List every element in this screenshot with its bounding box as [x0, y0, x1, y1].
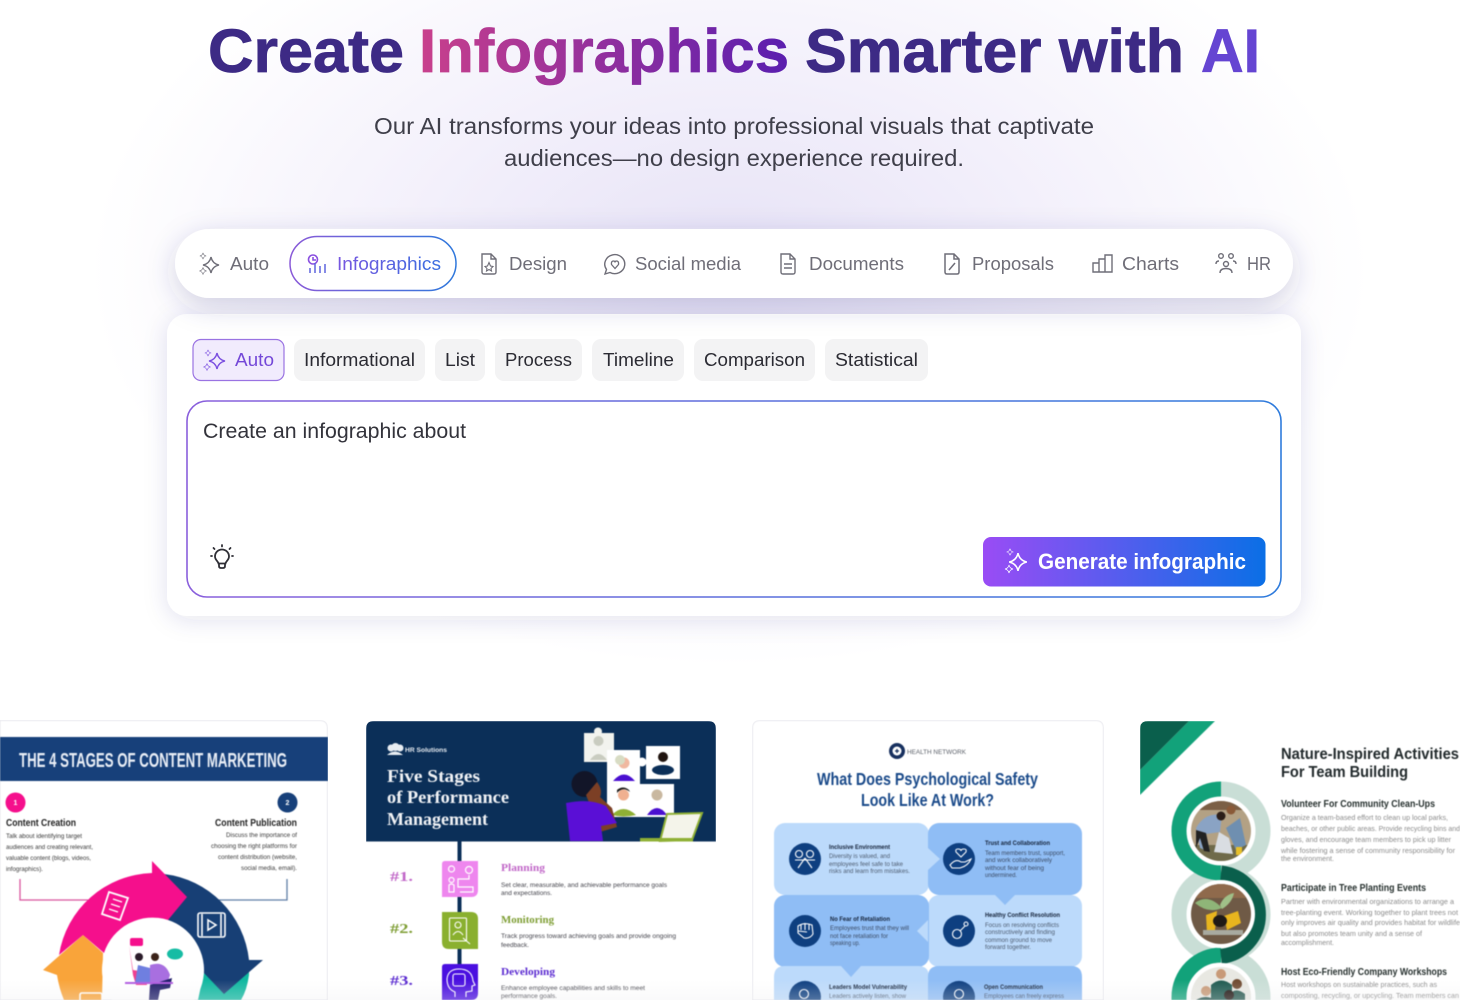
chip: Statistical [825, 339, 928, 381]
cycle diagram [43, 861, 263, 1000]
subtitle: audiences—no design experience required. [504, 145, 964, 171]
tab: Infographics (active): Infographics [337, 253, 441, 274]
activity 1: Organize a team-based effort to clean up local parks, [1281, 813, 1448, 822]
bubble: leaders model vulnerability: Leaders Model Vulnerability [829, 985, 908, 991]
tab: Charts: Charts [1122, 253, 1179, 274]
activity 1 [1280, 799, 1460, 863]
tab: Social media: Social media [635, 253, 742, 274]
chip: Timeline [592, 339, 684, 381]
chip: Statistical: Statistical [835, 349, 918, 370]
panel: prompt card [167, 314, 1301, 616]
bubble: leaders model vulnerability: Leaders actively listen, show [829, 994, 907, 1000]
card title [1281, 746, 1459, 781]
bubble: inclusive environment: Diversity is valued, and [829, 854, 890, 860]
panel: category tab bar [175, 229, 1293, 298]
step 2: monitoring: #2. [390, 921, 413, 936]
bubble: no fear of retaliation: speaking up. [830, 941, 860, 947]
chip: List: List [445, 349, 475, 370]
subtitle: Our AI transforms your ideas into professional visuals that captivate [374, 113, 1094, 139]
tab: Design [482, 253, 567, 274]
card title: What Does Psychological Safety [817, 769, 1038, 789]
header band [0, 737, 328, 781]
card: performance management infographic [366, 721, 716, 1000]
header: HR Solutions [405, 747, 447, 754]
header: Management [387, 809, 488, 829]
step 1: planning: Planning [501, 863, 545, 874]
step 1 text [6, 792, 93, 900]
step 3: developing: #3. [390, 973, 413, 988]
bubble: leaders model vulnerability [789, 981, 908, 1000]
step 2 text: Discuss the importance of [226, 832, 297, 839]
step 1: planning [390, 861, 668, 897]
card title: Look Like At Work? [861, 790, 994, 810]
bubble: trust and collaboration [943, 841, 1065, 879]
bubble: healthy conflict resolution [943, 913, 1060, 951]
step 2 text: choosing the right platforms for [211, 843, 298, 850]
photo: workshop group [1187, 963, 1255, 1000]
chip: Process [495, 339, 582, 381]
step 1 text: audiences and creating relevant, [6, 844, 93, 851]
illustration: team puzzle and thinker [566, 728, 702, 842]
header band: THE 4 STAGES OF CONTENT MARKETING [19, 750, 287, 772]
title: Infographics [419, 17, 789, 85]
activity 3: Host workshops on sustainable practices, such as [1281, 980, 1437, 989]
activity 2: tree-planting event. Working together to plant trees not [1281, 908, 1459, 917]
bubble: healthy conflict resolution: forward together. [985, 945, 1031, 951]
card title [816, 771, 1038, 807]
tab: Design: Design [509, 253, 567, 274]
step 3: developing [390, 964, 645, 1000]
speech bubble grid [774, 823, 1082, 1000]
bubble: trust and collaboration: Trust and Collaboration [985, 841, 1050, 847]
chip: List [435, 339, 485, 381]
step 1: planning: and expectations. [501, 890, 552, 897]
header: Five Stages [387, 766, 480, 786]
step 2 text: Content Publication [215, 818, 297, 829]
chip: Comparison [694, 339, 815, 381]
step 3: developing: performance goals. [501, 993, 557, 1000]
step 1: planning: #1. [390, 869, 413, 884]
chip: Auto (selected): Auto [235, 349, 274, 370]
bubble: inclusive environment [789, 843, 910, 875]
step 2 text: content distribution (website, [218, 854, 297, 861]
bubble: open communication: Open Communication [984, 985, 1043, 991]
step 2: monitoring: Track progress toward achieving goals and provide ongoing [501, 933, 676, 940]
icon: video [198, 913, 225, 937]
activity 2: Participate in Tree Planting Events [1281, 883, 1426, 894]
title: Create [208, 17, 404, 85]
bubble: healthy conflict resolution: Healthy Conflict Resolution [985, 913, 1060, 919]
tab: Charts [1093, 253, 1179, 274]
subtitle [374, 113, 1094, 171]
title: Smarter with [805, 17, 1184, 85]
icon: document [102, 892, 128, 920]
photo: clean-up volunteers [1190, 800, 1252, 862]
step 1: planning: Set clear, measurable, and achievable performance goals [501, 882, 668, 889]
linked photo rings [1179, 789, 1263, 1000]
activity 2: accomplishment. [1281, 938, 1334, 947]
chip: Informational: Informational [304, 349, 415, 370]
bubble: inclusive environment: employees feel safe to take [829, 862, 904, 868]
step 1 text: 1 [14, 800, 18, 807]
bubble: trust and collaboration: Team members trust, support, [985, 851, 1065, 857]
title: AI [1201, 17, 1260, 85]
bubble: healthy conflict resolution: common ground to move [985, 938, 1053, 944]
chip: Process: Process [505, 349, 572, 370]
icon: lightbulb [211, 545, 233, 568]
timeline spine [458, 841, 462, 1000]
step 1 text: Content Creation [6, 818, 76, 829]
chip: Informational [294, 339, 425, 381]
step 1 text: Talk about identifying target [6, 833, 82, 840]
bubble: healthy conflict resolution: Focus on resolving conflicts [985, 923, 1059, 929]
activity 2: but also promotes team unity and a sense of [1281, 929, 1423, 938]
step 2: monitoring: Monitoring [501, 915, 554, 926]
title [208, 17, 1260, 85]
tab: Auto [199, 253, 269, 275]
chip: Auto (selected) [193, 340, 284, 380]
card title: For Team Building [1281, 764, 1408, 781]
icon: tablet [80, 993, 102, 1000]
button: generate infographic [983, 537, 1266, 586]
step 2: monitoring: feedback. [501, 942, 529, 949]
bubble: no fear of retaliation: No Fear of Retaliation [830, 917, 890, 923]
tab: Proposals: Proposals [972, 253, 1054, 274]
tab: HR [1216, 253, 1271, 274]
step 3: developing: Enhance employee capabilities and skills to meet [501, 985, 645, 992]
header: of Performance [387, 787, 509, 807]
bubble: no fear of retaliation: Employees trust that they will [830, 926, 909, 932]
bubble: trust and collaboration: and work collaboratively [985, 858, 1052, 864]
category chips row [193, 339, 928, 381]
chip: Timeline: Timeline [603, 349, 674, 370]
activity 1: gloves, and encourage team members to pick up litter [1281, 835, 1451, 844]
corner ribbon [1140, 721, 1215, 795]
bubble: open communication [943, 981, 1064, 1000]
bubble: trust and collaboration: without fear of being [984, 866, 1044, 872]
activity 1: while fostering a sense of community responsibility for [1280, 846, 1455, 855]
bubble: inclusive environment: Inclusive Environment [829, 845, 890, 851]
chip: Comparison: Comparison [704, 349, 805, 370]
step 2 text [211, 792, 298, 900]
tab: Auto: Auto [230, 253, 269, 274]
activity 1: Volunteer For Community Clean-Ups [1281, 799, 1435, 810]
bubble: trust and collaboration: undermined. [985, 873, 1017, 879]
activity 1: the environment. [1281, 854, 1334, 863]
bubble: inclusive environment: risks and learn from mistakes. [829, 869, 910, 875]
tab: Infographics (active) [290, 236, 456, 290]
step 1 text: valuable content (blogs, videos, [6, 855, 91, 862]
activity 2: Partner with environmental organizations to arrange a [1281, 897, 1455, 906]
bubble: no fear of retaliation [789, 915, 909, 947]
step 2: monitoring [390, 912, 676, 949]
logo: Health Network [889, 743, 967, 759]
button: generate infographic: Generate infographic [1038, 549, 1246, 574]
bubble: healthy conflict resolution: constructively and finding [985, 930, 1055, 936]
activity 3 [1281, 967, 1459, 1000]
header [366, 721, 716, 842]
step 2 text: 2 [286, 800, 290, 807]
card: nature team building infographic [1140, 721, 1460, 1000]
prompt text: Create an infographic about [203, 420, 466, 443]
step 1 text: infographics). [6, 866, 43, 873]
card: content marketing infographic [0, 720, 328, 1000]
activity 2 [1281, 883, 1460, 947]
tab: HR: HR [1247, 253, 1271, 274]
bubble: open communication: Employees can freely express [984, 994, 1064, 1000]
logo: Health Network: HEALTH NETWORK [907, 749, 967, 756]
card: psychological safety infographic [752, 720, 1104, 1000]
logo: HR Solutions [387, 743, 404, 755]
photo: tree planting [1187, 880, 1255, 948]
step 3: developing: Developing [501, 967, 555, 978]
illustration: two people with phone [125, 938, 183, 1000]
step 2 text: social media, email). [241, 865, 297, 872]
prompt input box [187, 401, 1281, 597]
bubble: no fear of retaliation: not face retaliation for [830, 934, 888, 940]
tab: Documents: Documents [809, 253, 904, 274]
